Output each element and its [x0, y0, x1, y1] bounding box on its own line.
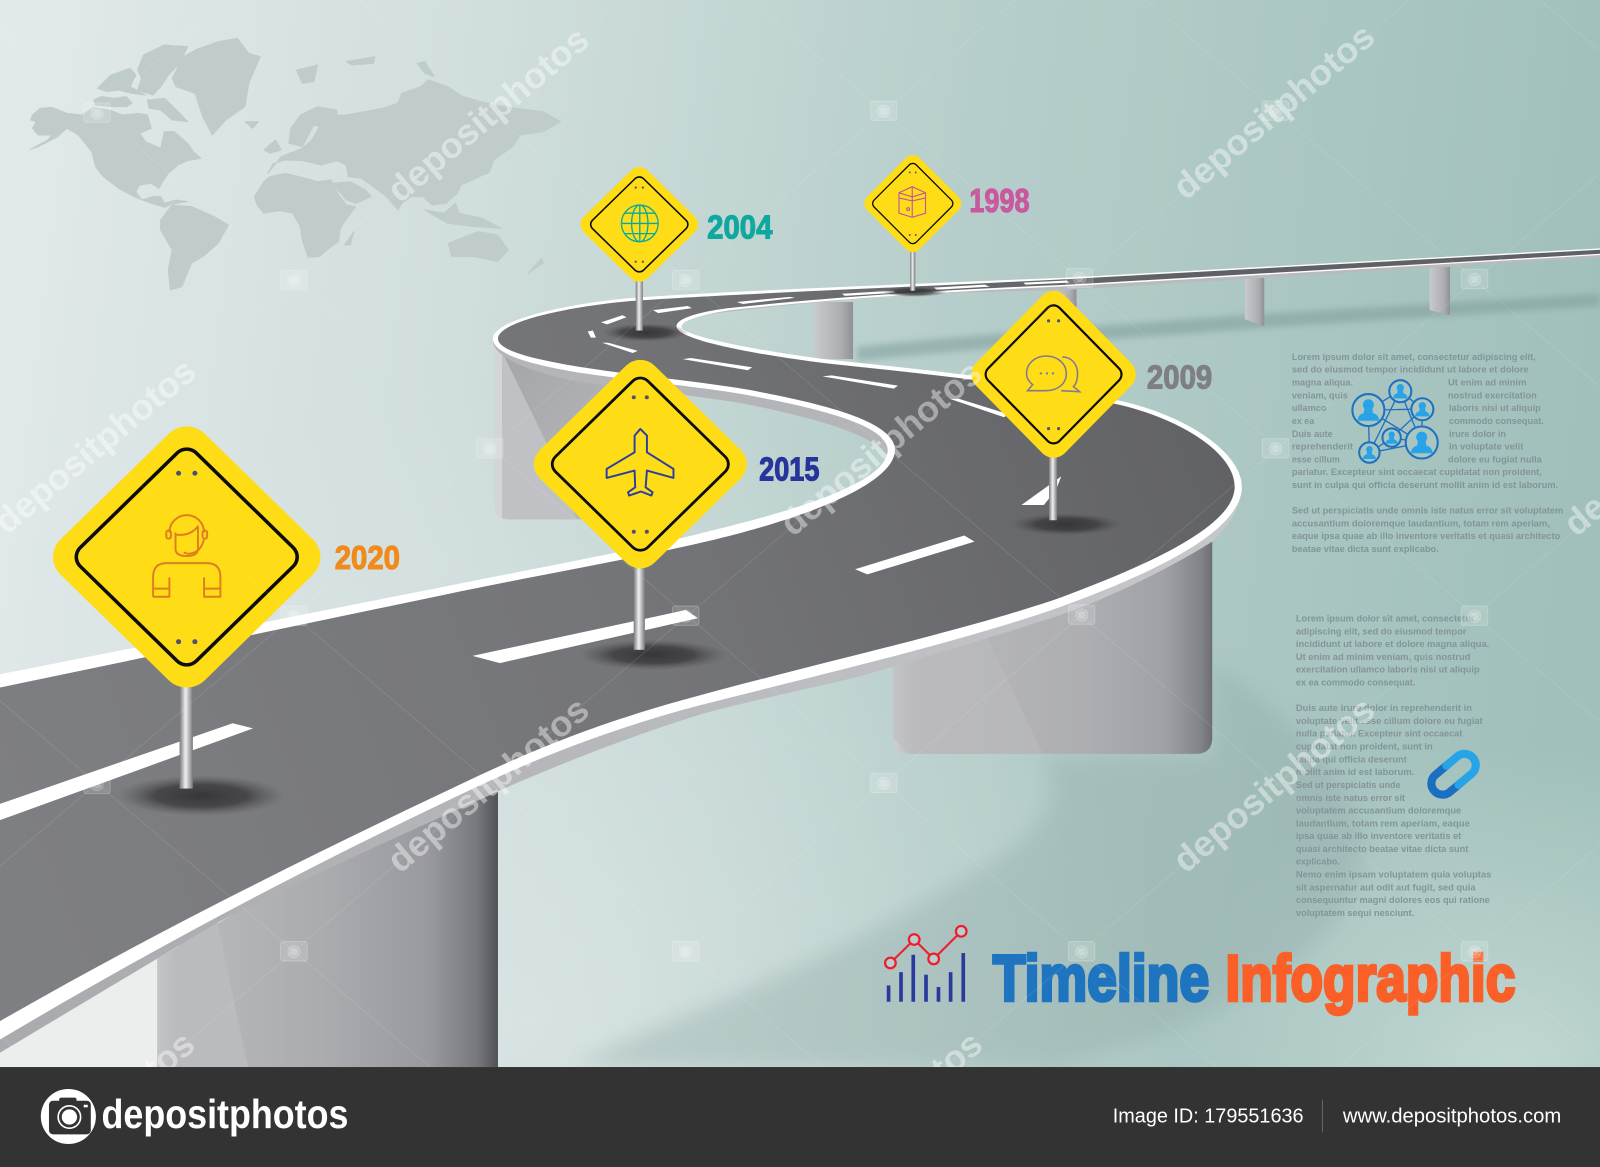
text block: upper right: beatae vitae dicta sunt explicabo.: [1292, 544, 1439, 554]
label: 2015: 2015: [759, 451, 819, 488]
text block: lower right: Lorem ipsum dolor sit amet, consectetur: [1296, 613, 1475, 623]
text block: lower right: quasi architecto beatae vitae dicta sunt: [1296, 844, 1468, 854]
text block: upper right: sunt in culpa qui officia deserunt mollit anim id est laborum.: [1292, 480, 1558, 490]
text block: upper right: in voluptate velit: [1449, 442, 1523, 452]
icon: line and bar chart: [885, 926, 967, 1002]
support: small column: [814, 302, 853, 359]
footer website: www.depositphotos.com: [1342, 1106, 1561, 1128]
text block: lower right: exercitation ullamco laboris nisi ut aliquip: [1296, 665, 1480, 675]
icon: globe: [621, 205, 658, 242]
watermark: tos: [923, 1023, 990, 1088]
icon: speech bubbles: [1027, 356, 1080, 392]
watermark: tos: [136, 1023, 202, 1088]
sign: 2004: [592, 178, 689, 342]
text block: lower right: explicabo.: [1296, 857, 1340, 867]
text block: lower right: incididunt ut labore et dolore magna aliqua.: [1296, 639, 1489, 649]
text block: upper right: Lorem ipsum dolor sit amet, consectetur adipiscing elit,: [1292, 352, 1536, 362]
title: Infographic: [1226, 942, 1515, 1015]
support: beam pillar two: [1245, 275, 1264, 326]
sign: 1998: [873, 164, 952, 297]
text block: upper right: esse cillum: [1292, 454, 1340, 464]
footer logo text: depositphotos: [102, 1091, 348, 1137]
pole shadow: [580, 640, 727, 670]
text block: lower right: Duis aute irure dolor in reprehenderit in: [1296, 703, 1472, 713]
road lips: [0, 459, 1242, 1053]
text block: upper right: irure dolor in: [1449, 429, 1507, 439]
footer image id: Image ID: 179551636: [1113, 1106, 1304, 1128]
diamond board: [592, 178, 687, 271]
pole: [1049, 454, 1057, 520]
label: 2004: 2004: [707, 210, 773, 247]
label: 2020: 2020: [335, 540, 400, 577]
text block: upper right: nostrud exercitation: [1448, 390, 1537, 400]
text block: lower right: consequuntur magni dolores eos qui ratione: [1296, 895, 1490, 905]
road: [0, 248, 1600, 1053]
sign: 2020: [79, 451, 295, 816]
text block: upper right: Duis aute: [1292, 429, 1333, 439]
icon: headset operator: [153, 515, 220, 597]
text block: lower right: cupidatat non proident, sunt in: [1296, 741, 1433, 751]
label: 1998: 1998: [969, 183, 1030, 220]
pole shadow: [882, 287, 947, 297]
text block: lower right: Ut enim ad minim veniam, quis nostrud: [1296, 652, 1470, 662]
watermark: depositphotos: [379, 689, 597, 880]
text block: lower right: voluptatem sequi nesciunt.: [1296, 908, 1414, 918]
text block: lower right: voluptate velit esse cillum dolore eu fugiat: [1296, 716, 1483, 726]
support: beam pillar three: [1430, 265, 1450, 315]
diamond board: [987, 307, 1120, 442]
watermark: depositphotos: [1165, 16, 1382, 207]
bridge supports: [157, 265, 1450, 1067]
watermark: depositphotos: [772, 352, 990, 544]
text block: lower right: voluptatem accusantium doloremque: [1296, 806, 1461, 816]
text block: upper right: ex ea: [1292, 416, 1315, 426]
lane markings: [0, 281, 1069, 820]
text block: upper right: laboris nisi ut aliquip: [1449, 403, 1541, 413]
diamond board: [79, 451, 295, 663]
watermark: depositphotos: [1165, 689, 1382, 880]
icon: box: [899, 187, 926, 217]
text block: lower right: adipiscing elit, sed do eiusmod tempor: [1296, 626, 1467, 636]
text block: upper right: eaque ipsa quae ab illo inventore veritatis et quasi architecto: [1292, 531, 1561, 541]
pole shadow: [1010, 513, 1122, 536]
text block: upper right: commodo consequat.: [1449, 416, 1544, 426]
label: 2009: 2009: [1147, 360, 1212, 397]
text block: lower right: [1296, 613, 1491, 918]
world map: [31, 38, 561, 290]
road white edge: [0, 248, 1600, 1039]
text block: upper right: ullamco: [1292, 403, 1327, 413]
text block: lower right: Nemo enim ipsam voluptatem quia voluptas: [1296, 870, 1491, 880]
icon: people network: [1352, 380, 1438, 463]
text block: lower right: sit aspernatur aut odit aut fugit, sed quia: [1296, 882, 1476, 892]
diamond board: [873, 164, 952, 243]
title: [993, 942, 1515, 1015]
text block: lower right: Sed ut perspiciatis unde: [1296, 780, 1401, 790]
footer logo mark: [41, 1089, 96, 1144]
text block: lower right: culpa qui officia deserunt: [1296, 754, 1407, 764]
text block: lower right: omnis iste natus error sit: [1296, 793, 1405, 803]
diamond board: [554, 380, 727, 548]
sign: 2015: [554, 380, 727, 670]
text block: upper right: magna aliqua.: [1292, 377, 1353, 387]
support: upper-left pier: [495, 342, 682, 519]
text block: upper right: veniam, quis: [1292, 390, 1348, 400]
text block: upper right: dolore eu fugiat nulla: [1448, 454, 1543, 464]
sign: 2009: [987, 307, 1122, 536]
text block: upper right: sed do eiusmod tempor incididunt ut labore et dolore: [1292, 365, 1529, 375]
icon: chain link: [1427, 749, 1480, 799]
text block: lower right: laudantium, totam rem aperiam, eaque: [1296, 818, 1470, 828]
icon: airplane: [607, 429, 673, 496]
text block: lower right: ex ea commodo consequat.: [1296, 678, 1415, 688]
text block: lower right: nulla pariatur. Excepteur sint occaecat: [1296, 729, 1462, 739]
text block: upper right: [1292, 352, 1563, 554]
text block: upper right: reprehenderit: [1292, 442, 1353, 452]
pole: [180, 683, 193, 789]
support: right pier: [893, 530, 1212, 754]
pole: [634, 564, 645, 650]
road surface: [0, 250, 1600, 1021]
support: front pier: [157, 760, 498, 1067]
text block: upper right: Sed ut perspiciatis unde omnis iste natus error sit voluptatem: [1292, 506, 1563, 516]
pole shadow: [603, 323, 689, 342]
pole: [910, 250, 915, 291]
pole shadow: [117, 775, 285, 816]
text block: lower right: mollit anim id est laborum.: [1296, 767, 1414, 777]
pole: [636, 280, 643, 331]
text block: upper right: Ut enim ad minim: [1448, 377, 1527, 387]
watermark: depositphotos: [379, 19, 597, 210]
text block: upper right: accusantium doloremque laudantium, totam rem aperiam,: [1292, 518, 1550, 528]
title: Timeline: [993, 942, 1209, 1015]
text block: lower right: ipsa quae ab illo inventore veritatis et: [1296, 831, 1461, 841]
text block: upper right: pariatur. Excepteur sint occaecat cupidatat non proident,: [1292, 467, 1542, 477]
support: beam pillar one: [1055, 288, 1077, 318]
footer bar: [0, 1067, 1600, 1167]
